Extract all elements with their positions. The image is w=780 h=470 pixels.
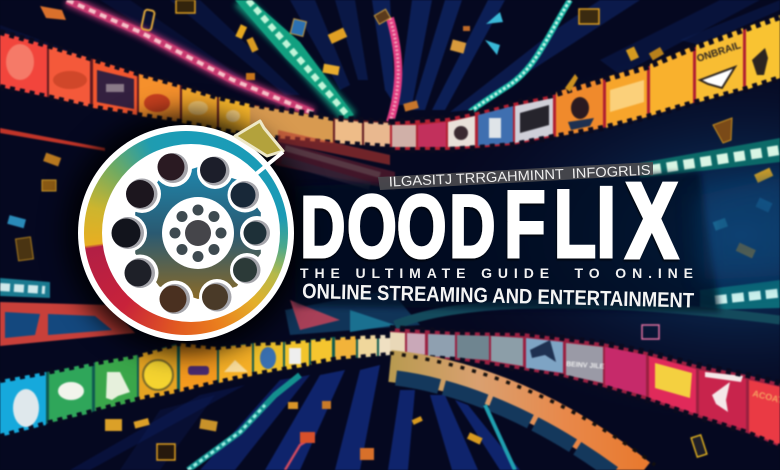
logo: reel drawing bbox=[102, 119, 285, 322]
pink neon film strip bbox=[67, 0, 313, 113]
film strip: top left bbox=[0, 32, 390, 147]
film strip: bottom left bbox=[0, 335, 390, 437]
pink curve bbox=[390, 18, 398, 122]
logo: film reel badge bbox=[78, 125, 294, 341]
blue glow at the right of the title bbox=[700, 175, 780, 280]
main title: O bbox=[347, 178, 397, 277]
subtitle line 2: ONLINE STREAMING AND ENTERTAINMENT bbox=[302, 280, 694, 313]
teal wave film bbox=[470, 0, 570, 112]
film fragments left of logo bbox=[0, 128, 420, 346]
film strip: top right: ONBRAIL bbox=[696, 40, 742, 65]
main title: L bbox=[554, 169, 596, 278]
subtitle line 1: THE ULTIMATE GUIDE TO ON.INE bbox=[300, 265, 693, 281]
teal film: right side bbox=[640, 138, 780, 310]
green neon film strip bbox=[235, 0, 354, 118]
main title: O bbox=[397, 178, 447, 277]
blue rays, top bbox=[0, 0, 780, 112]
logo: centre hub bbox=[162, 197, 234, 269]
tagline band: ILGASITJ TRRGAHMINNT INFOGRLIS bbox=[388, 162, 651, 189]
film strip: top right bbox=[390, 15, 780, 150]
blue rays, bottom bbox=[70, 365, 520, 470]
orange curved film strip, lower right bbox=[390, 353, 655, 470]
film strip: bottom right: BEINV JILE bbox=[566, 361, 605, 371]
teal film, lower centre bbox=[188, 375, 515, 470]
dark panel behind title text bbox=[295, 172, 720, 312]
main title: F bbox=[504, 171, 546, 278]
red film behind title bbox=[275, 130, 395, 190]
main title: I bbox=[596, 165, 616, 279]
teal curved band, lower centre bbox=[395, 304, 780, 325]
logo: white inner disc bbox=[102, 144, 280, 322]
logo: film tail bbox=[235, 121, 283, 174]
logo: gear bbox=[135, 167, 261, 299]
main title: D bbox=[449, 178, 496, 277]
logo: reel holes bbox=[109, 149, 274, 318]
main title: D bbox=[300, 179, 345, 277]
main title: X bbox=[626, 161, 677, 280]
logo: rainbow ring bbox=[84, 131, 288, 335]
film strip: bottom right bbox=[390, 328, 780, 447]
